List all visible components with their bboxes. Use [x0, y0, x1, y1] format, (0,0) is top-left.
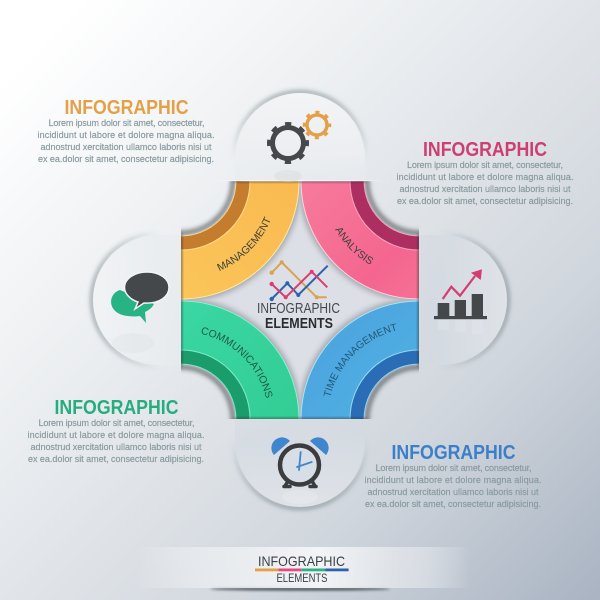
text block: blue: INFOGRAPHIC	[392, 442, 516, 464]
text block: pink: adnostrud xercitation ullamco laboris nisi ut	[400, 184, 571, 194]
label: time management: TIME MANAGEMENT	[324, 323, 396, 396]
panel: left semicircle with speech bubbles	[92, 234, 181, 366]
central logo: line chart	[270, 260, 328, 301]
text block: orange: ex ea.dolor sit amet, consectetur adipisicing.	[38, 154, 214, 164]
text block: blue: incididunt ut labore et dolore magna aliqua.	[364, 475, 542, 485]
icon: orange gear	[304, 112, 330, 138]
text block: orange: adnostrud xercitation ullamco laboris nisi ut	[40, 142, 212, 152]
label: analysis: ANALYSIS	[335, 228, 373, 264]
panel: analysis arc	[300, 181, 419, 300]
text block: orange: incididunt ut labore et dolore magna aliqua.	[38, 130, 214, 140]
panel: communications arc	[181, 300, 300, 419]
footer banner	[135, 547, 470, 591]
icon: chart reflection	[438, 320, 483, 334]
text block: pink: INFOGRAPHIC	[423, 139, 547, 161]
icon: bubble reflection	[112, 333, 154, 353]
footer title: INFOGRAPHIC	[258, 553, 345, 569]
icon: clock hands	[297, 452, 312, 470]
icon: rising arrow	[443, 269, 482, 299]
icon: clock face	[280, 446, 319, 484]
panel: management arc	[181, 181, 300, 300]
text block: orange: Lorem ipsum dolor sit amet, consectetur,	[48, 118, 204, 128]
central logo: title: INFOGRAPHIC	[257, 301, 340, 317]
text block: blue	[364, 442, 542, 509]
text block: blue: ex ea.dolor sit amet, consectetur adipisicing.	[365, 499, 541, 509]
text block: green	[28, 397, 204, 464]
text block: green: incididunt ut labore et dolore magna aliqua.	[28, 430, 204, 440]
text block: green: Lorem ipsum dolor sit amet, consectetur,	[38, 418, 194, 428]
panel: top semicircle with gears	[214, 92, 386, 182]
icon: clock bells	[271, 437, 329, 455]
footer subtitle: ELEMENTS	[276, 573, 328, 585]
panel: bottom semicircle with clock	[234, 419, 366, 508]
central logo: title	[257, 301, 340, 332]
text block: green: INFOGRAPHIC	[54, 397, 178, 419]
icon: bars	[434, 294, 487, 319]
icon: clock reflection	[282, 490, 318, 504]
text block: orange: INFOGRAPHIC	[64, 97, 188, 119]
panel: time management arc	[300, 300, 419, 419]
text block: pink	[396, 139, 574, 206]
icon: dark gear	[270, 124, 306, 162]
label: management: MANAGEMENT	[217, 216, 270, 271]
text block: green: ex ea.dolor sit amet, consectetur adipisicing.	[28, 454, 204, 464]
text block: pink: incididunt ut labore et dolore magna aliqua.	[396, 172, 574, 182]
text block: blue: adnostrud xercitation ullamco laboris nisi ut	[368, 487, 539, 497]
icon: dark speech bubble	[124, 272, 169, 309]
icon: gears reflection	[274, 170, 302, 182]
text block: pink: ex ea.dolor sit amet, consectetur adipisicing.	[397, 196, 573, 206]
label: communications: COMMUNICATIONS	[202, 327, 272, 398]
icon: green speech bubble	[111, 290, 154, 323]
text block: pink: Lorem ipsum dolor sit amet, consectetur,	[407, 160, 563, 170]
panel: right semicircle with growth chart	[419, 234, 508, 366]
central logo: title: ELEMENTS	[265, 316, 333, 332]
footer colour stripe	[255, 568, 349, 571]
panel: central diamond	[181, 181, 419, 419]
text block: orange	[38, 97, 214, 164]
text block: green: adnostrud xercitation ullamco laboris nisi ut	[30, 442, 202, 452]
text block: blue: Lorem ipsum dolor sit amet, consectetur,	[376, 463, 532, 473]
icon: clock feet	[284, 481, 316, 486]
